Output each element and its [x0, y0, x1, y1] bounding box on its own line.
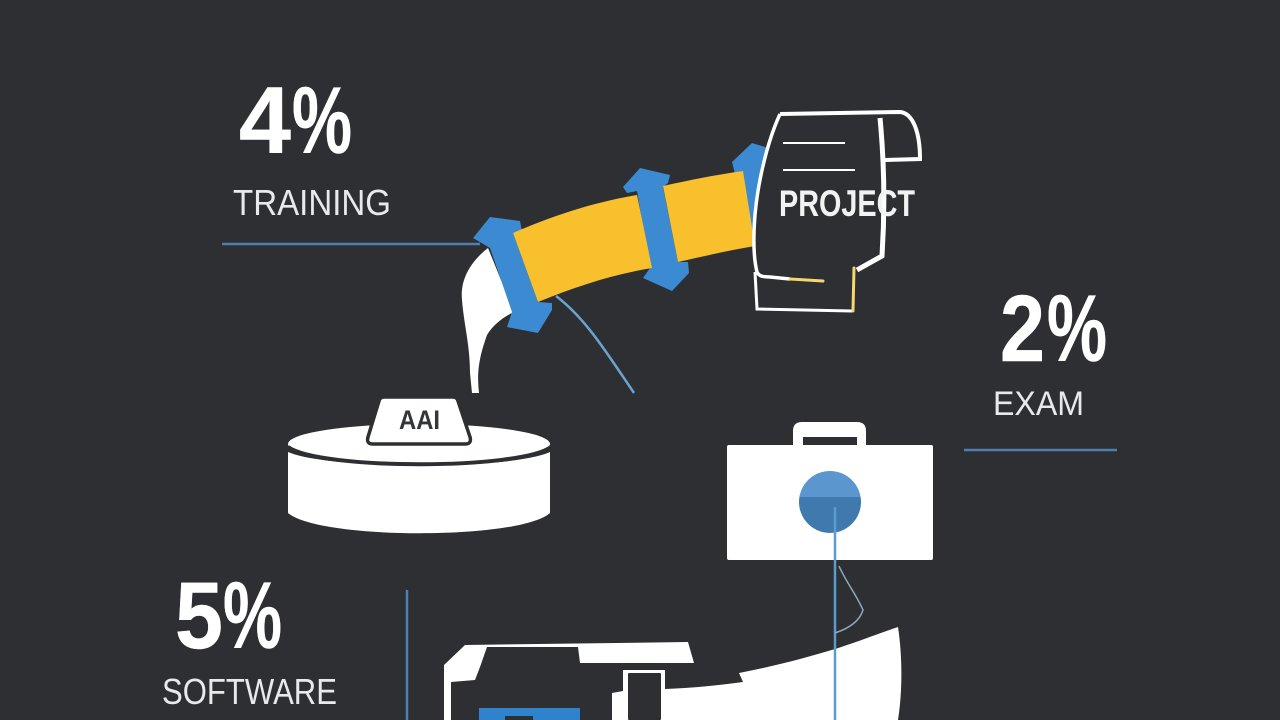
value: 4%: 4: [239, 68, 291, 174]
rule: software: [406, 590, 408, 720]
yellow segment right: [663, 171, 755, 262]
icon: white swoosh: [462, 248, 514, 393]
lens bottom half: [799, 497, 861, 533]
yellow accent strokes: [790, 268, 854, 311]
disk top: [288, 424, 550, 464]
stat: 2% exam: [964, 276, 1117, 450]
lower outline: [755, 272, 852, 311]
right blue clamp: [732, 143, 775, 246]
hull: [612, 627, 901, 720]
label: software: SOFTWARE: [162, 671, 337, 712]
disk edge line: [288, 447, 551, 464]
left blue clamp: [473, 217, 552, 333]
value: 5%: %: [223, 563, 282, 669]
icon: project document: [754, 112, 920, 311]
stat: 4% training: [222, 68, 480, 244]
icon: briefcase: [727, 422, 933, 560]
disk body: [288, 452, 550, 533]
document title: PROJECT: [779, 183, 915, 224]
document body: [754, 113, 884, 311]
rule: exam: [964, 449, 1117, 451]
handle: [793, 422, 866, 446]
icon: white disk with tab: [288, 397, 551, 533]
blue screen: [479, 708, 580, 720]
rule: training: [222, 243, 480, 245]
hatch: [628, 673, 661, 720]
value: 4%: %: [292, 68, 352, 174]
middle blue clamp: [623, 168, 689, 291]
connector: blue vertical line: [834, 507, 836, 720]
case body: [727, 445, 933, 560]
connector: sail curve: [835, 566, 863, 633]
yellow segment left: [513, 195, 652, 302]
icon: yellow and blue band: [473, 143, 775, 333]
icon: lower machine left: [444, 642, 694, 720]
tab: [368, 397, 470, 444]
stat: 5% software: [162, 563, 407, 720]
label: exam: EXAM: [993, 385, 1084, 423]
icon: lower boat shape: [612, 627, 901, 720]
document text lines: [783, 143, 855, 170]
value: 5%: 5: [175, 563, 223, 669]
right edge and tab: [857, 118, 884, 270]
label: training: TRAINING: [233, 182, 391, 223]
document outline: [754, 114, 790, 279]
top edge and curl: [780, 112, 920, 160]
machine outline: [444, 642, 694, 720]
connector: blue curve: [556, 296, 634, 393]
value: 2%: %: [1047, 276, 1107, 382]
value: 2%: 2: [1000, 276, 1045, 382]
lens top half: [799, 471, 861, 497]
tab text: AAI: [399, 405, 440, 435]
